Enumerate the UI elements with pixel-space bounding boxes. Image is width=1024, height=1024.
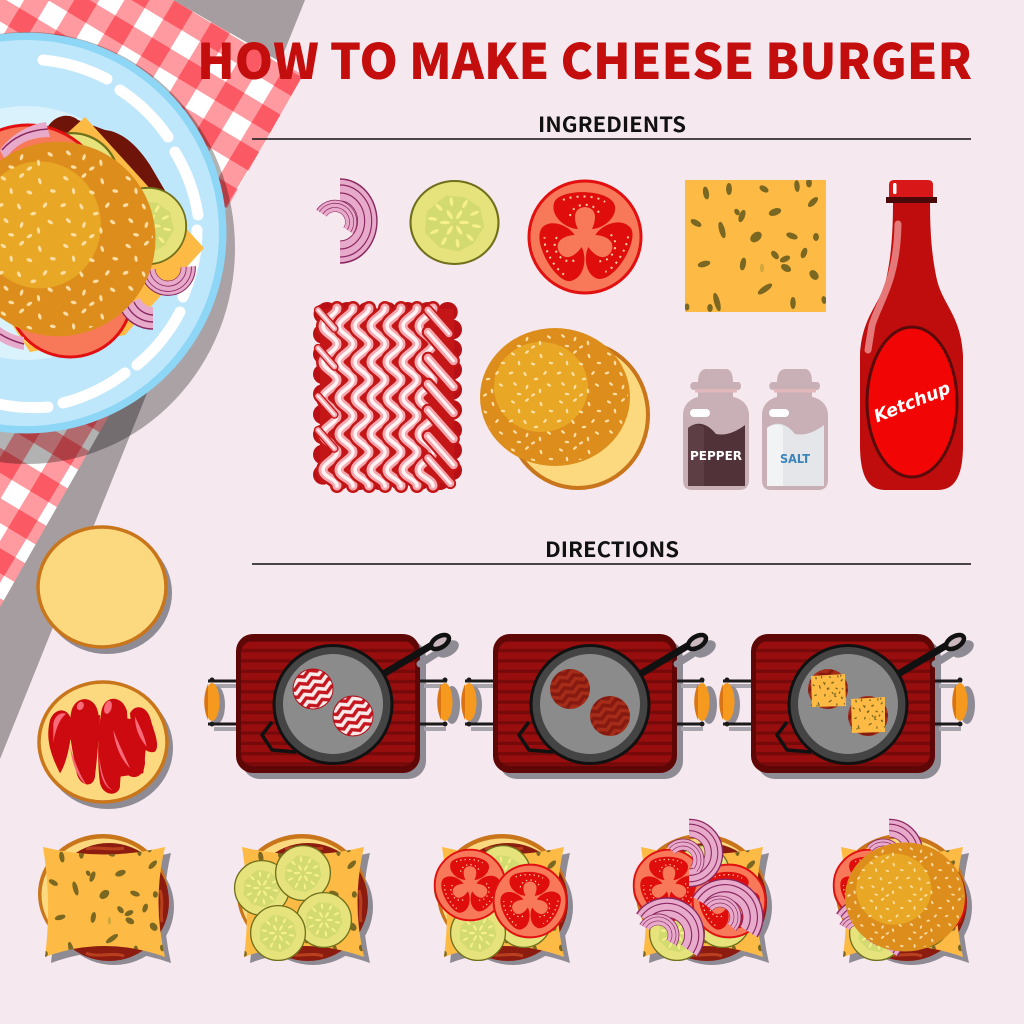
onion wedge lower left [0, 327, 24, 350]
bottle label: Ketchup [871, 379, 954, 427]
step: add onions [634, 819, 777, 965]
step: add pickles [235, 834, 373, 965]
heading: ingredients: INGREDIENTS [538, 109, 686, 139]
ingredient: ketchup bottle [860, 180, 963, 490]
onion wedge lower right [120, 298, 153, 329]
step: bun with ketchup [39, 682, 173, 809]
step: grill with raw patties [204, 632, 462, 779]
step: plain bun [38, 527, 172, 654]
burger on plate [0, 116, 204, 357]
title: HOW TO MAKE CHEESE BURGER [197, 23, 972, 94]
ingredient: ground meat [318, 308, 454, 486]
step: grill with cooked patties [461, 632, 719, 779]
plate with burger [0, 32, 235, 464]
tablecloth with shadow [0, 0, 305, 759]
salt label: SALT [780, 451, 810, 466]
ingredient: onion [317, 179, 377, 263]
ingredient: burger buns [480, 328, 648, 488]
onion wedge upper left [0, 122, 50, 160]
ingredient: tomato [529, 181, 641, 293]
ingredient: pickle [411, 181, 498, 264]
ingredient: pepper jar [683, 369, 749, 490]
step: grill with cheese patties [719, 632, 977, 779]
step: cheese on patty [38, 834, 174, 965]
heading: directions: DIRECTIONS [545, 534, 679, 564]
step: add top bun [834, 819, 972, 965]
step: add tomatoes [435, 834, 573, 965]
pepper label: PEPPER [690, 448, 742, 463]
ingredient: salt jar [762, 369, 828, 490]
ingredient: cheese slice [685, 179, 827, 312]
